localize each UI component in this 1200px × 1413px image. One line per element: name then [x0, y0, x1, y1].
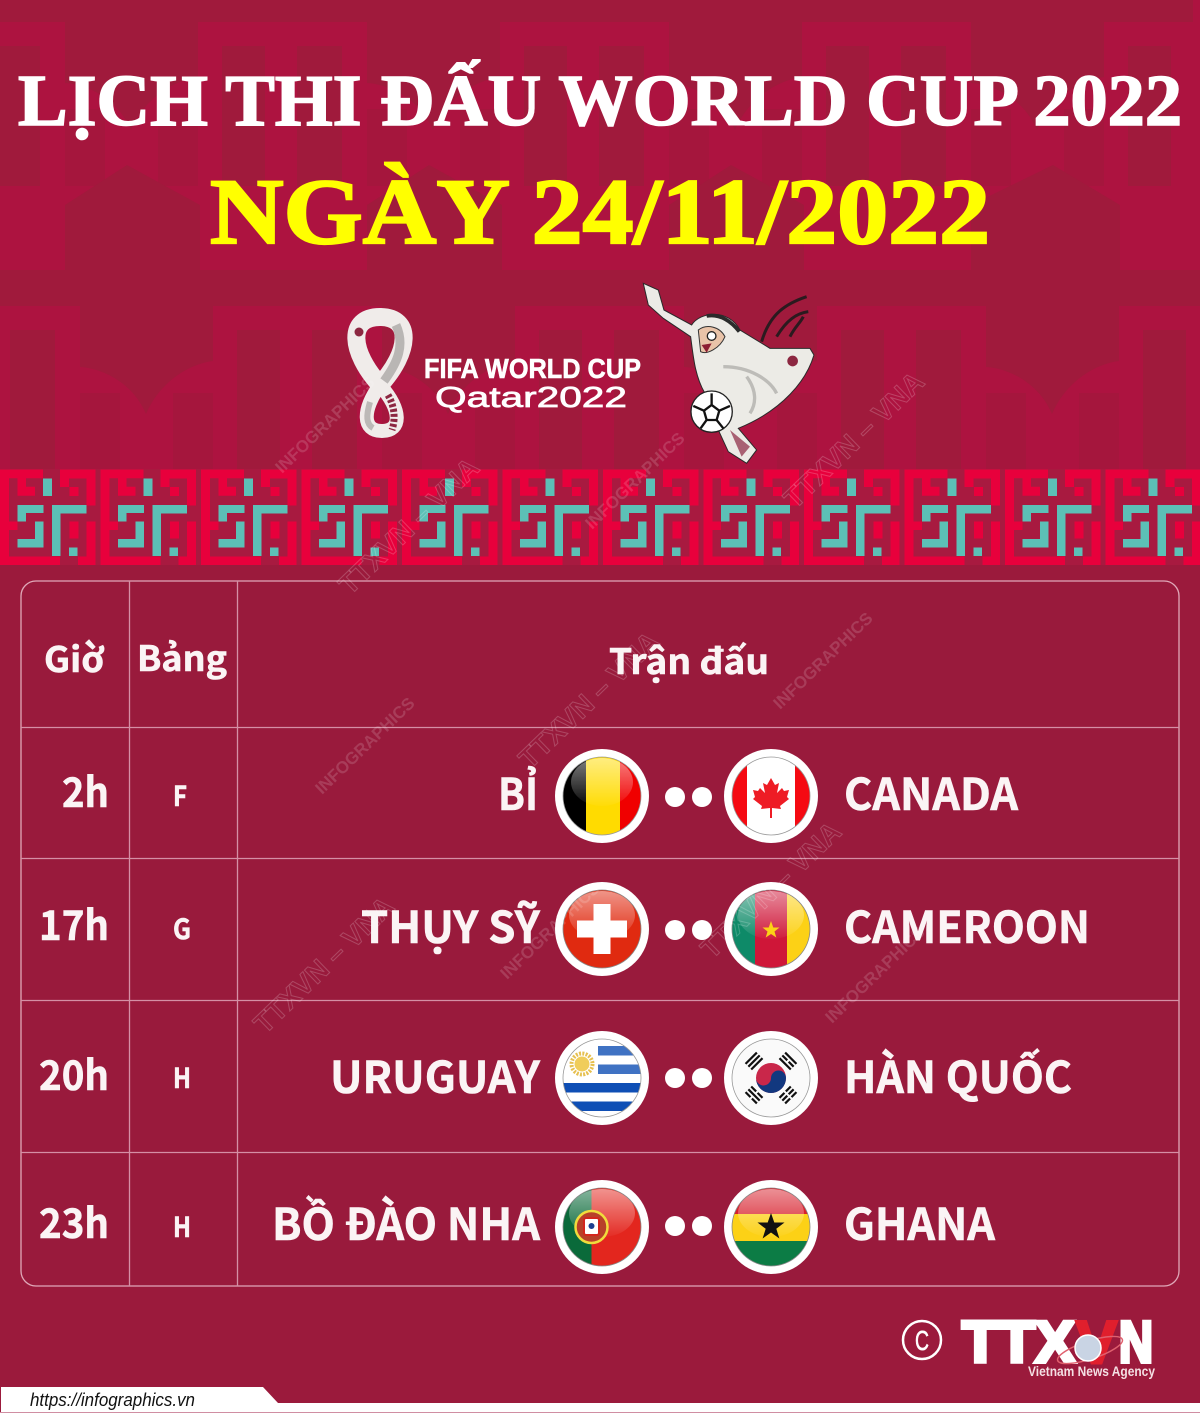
row 4: Portugal vs Ghana: GHANA	[844, 1189, 996, 1253]
panel: schedule table	[21, 581, 1179, 1286]
row 3: Uruguay vs South Korea: 20h	[39, 1042, 109, 1102]
row 4: Portugal vs Ghana: 23h	[39, 1190, 109, 1250]
row 3: Uruguay vs South Korea: H	[173, 1057, 191, 1097]
table header: match: Trận đấu	[609, 634, 769, 685]
row 4: Portugal vs Ghana: BỒ ĐÀO NHA	[272, 1189, 541, 1253]
mascot: La'eeb	[643, 283, 814, 463]
flag: Belgium	[555, 749, 649, 843]
row 2: Switzerland vs Cameroon	[39, 882, 1090, 976]
logo text: FIFA World Cup Qatar 2022: Qatar2022	[435, 382, 627, 414]
ornamental key band	[0, 469, 1200, 565]
match dots	[665, 787, 712, 807]
watermarks	[248, 366, 930, 1039]
flag: Canada	[724, 749, 818, 843]
footer strip with website	[0, 1387, 1200, 1413]
row 1: Belgium vs Canada	[62, 749, 1019, 843]
background key pattern: upper	[0, 0, 1200, 470]
website url: https://infographics.vn	[30, 1390, 195, 1410]
title: LỊCH THI ĐẤU WORLD CUP 2022	[18, 59, 1182, 141]
copyright mark	[903, 1321, 941, 1359]
match dots	[665, 1216, 712, 1236]
flag: Portugal	[555, 1180, 649, 1274]
watermarks: INFOGRAPHICS	[582, 429, 689, 533]
watermarks: TTXVN – VNA	[333, 452, 485, 600]
logo: TTXVN Vietnam News Agency: TTX	[962, 1310, 1075, 1375]
watermarks: INFOGRAPHICS	[770, 609, 877, 713]
row 2: Switzerland vs Cameroon: G	[173, 908, 191, 948]
logo text: FIFA World Cup Qatar 2022: FIFA WORLD CUP	[424, 353, 641, 384]
watermarks: INFOGRAPHICS	[822, 923, 929, 1027]
row 1: Belgium vs Canada: BỈ	[498, 759, 538, 823]
watermarks: TTXVN – VNA	[778, 366, 930, 514]
logo: TTXVN Vietnam News Agency: V	[1076, 1309, 1117, 1376]
logo text: FIFA World Cup Qatar 2022	[424, 353, 641, 414]
logo: TTXVN Vietnam News Agency: Vietnam News Agency	[1028, 1364, 1155, 1379]
watermarks: TTXVN – VNA	[513, 626, 665, 774]
match dots	[665, 1068, 712, 1088]
table header: group: Bảng	[137, 631, 227, 682]
row 2: Switzerland vs Cameroon: 17h	[39, 892, 109, 952]
row 3: Uruguay vs South Korea	[39, 1031, 1072, 1125]
row 3: Uruguay vs South Korea: URUGUAY	[330, 1042, 540, 1106]
row 2: Switzerland vs Cameroon: CAMEROON	[844, 892, 1090, 956]
logo: TTXVN Vietnam News Agency	[962, 1309, 1155, 1379]
row 1: Belgium vs Canada: 2h	[62, 759, 109, 819]
row 1: Belgium vs Canada: F	[173, 775, 187, 815]
flag: Cameroon	[724, 882, 818, 976]
row 1: Belgium vs Canada: CANADA	[844, 759, 1019, 823]
logo: TTXVN Vietnam News Agency: N	[1119, 1310, 1153, 1375]
row 4: Portugal vs Ghana	[39, 1180, 996, 1274]
logo: FIFA World Cup emblem	[354, 317, 404, 431]
row 4: Portugal vs Ghana: H	[173, 1206, 191, 1246]
watermarks: INFOGRAPHICS	[497, 879, 604, 983]
table header: time: Giờ	[44, 632, 104, 683]
watermarks: INFOGRAPHICS	[272, 373, 379, 477]
flag: Uruguay	[555, 1031, 649, 1125]
match dots	[665, 920, 712, 940]
row 2: Switzerland vs Cameroon: THỤY SỸ	[361, 892, 540, 956]
flag: Ghana	[724, 1180, 818, 1274]
watermarks: TTXVN – VNA	[695, 816, 847, 964]
watermarks: INFOGRAPHICS	[312, 694, 419, 798]
date heading: NGÀY 24/11/2022	[210, 161, 990, 264]
flag: Switzerland	[555, 882, 649, 976]
row 3: Uruguay vs South Korea: HÀN QUỐC	[844, 1042, 1072, 1106]
copyright mark: C	[915, 1325, 929, 1356]
flag: South Korea	[724, 1031, 818, 1125]
watermarks: TTXVN – VNA	[248, 891, 400, 1039]
